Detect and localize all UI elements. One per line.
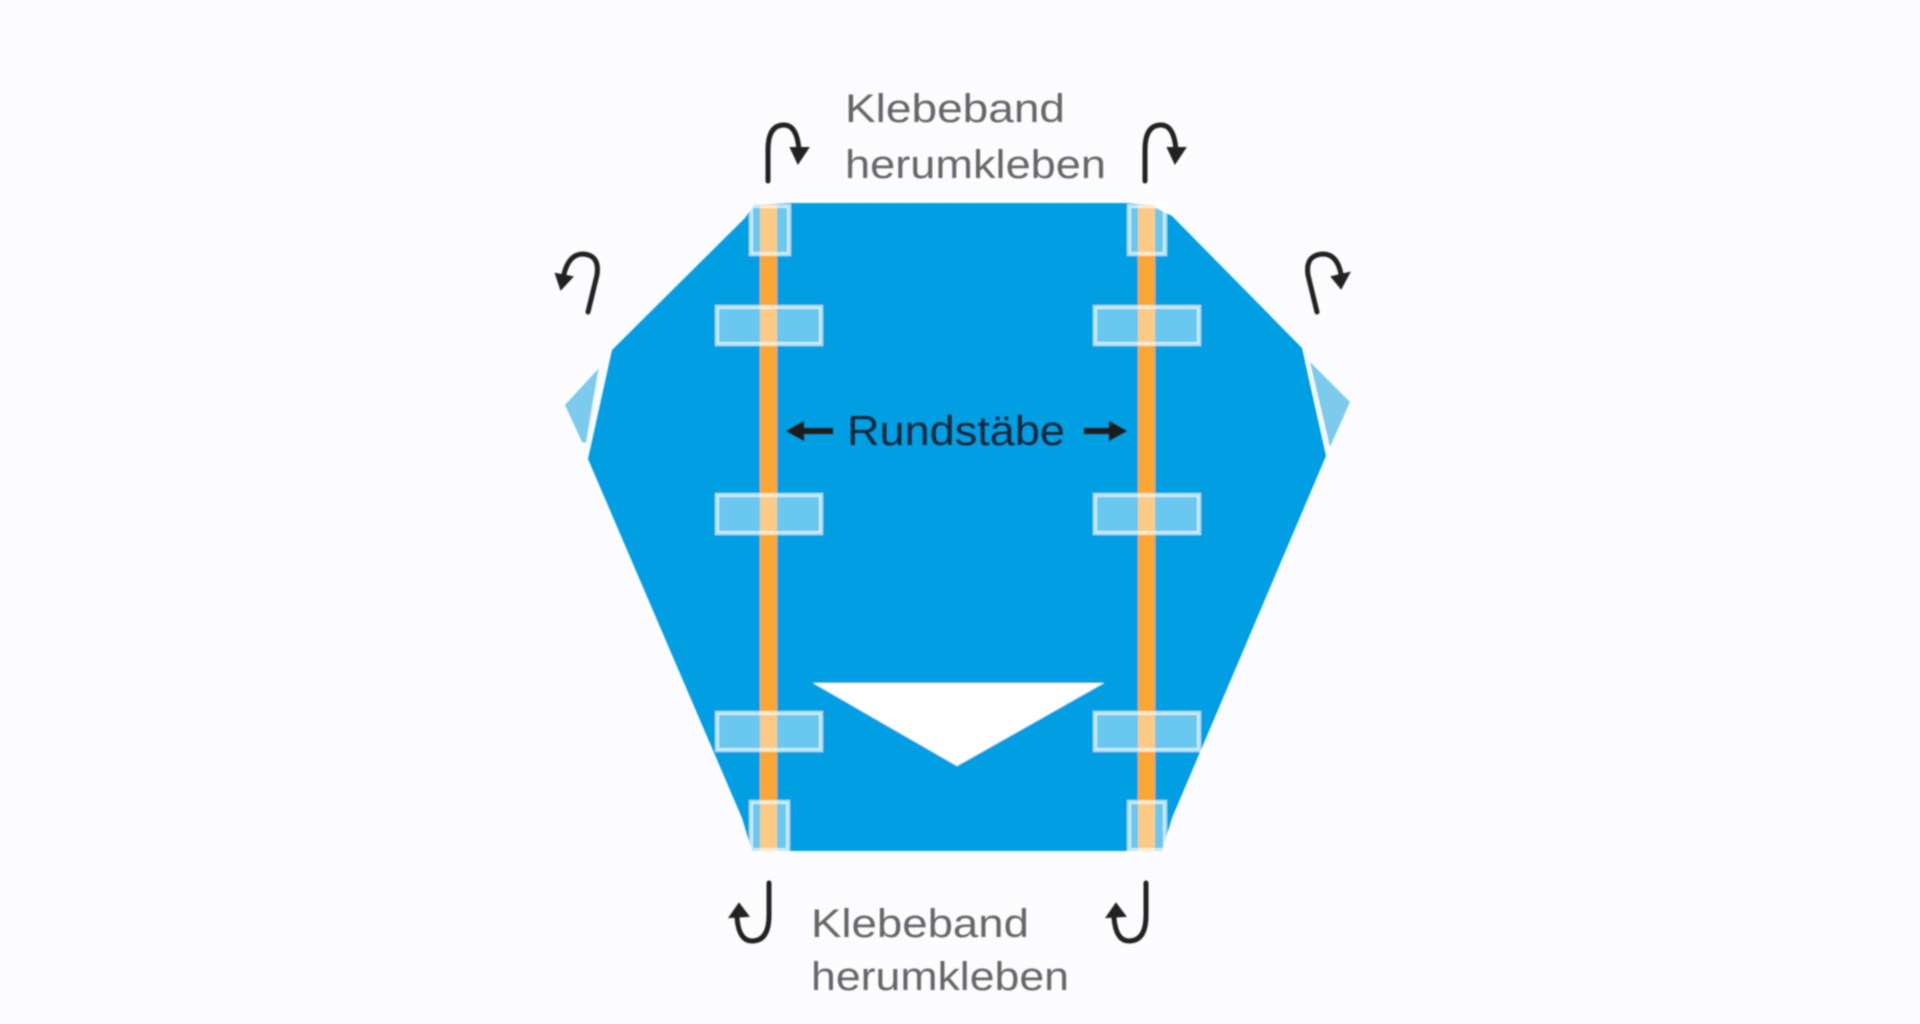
arrow bottom right	[1107, 883, 1146, 941]
white triangle opening	[813, 683, 1104, 766]
tape bottom right	[1129, 802, 1165, 850]
right dowel	[1138, 205, 1155, 851]
label: top tape instruction	[845, 87, 1106, 187]
tape right 3	[1095, 713, 1199, 750]
arrow to left dowel	[786, 421, 833, 441]
arrow top left	[768, 125, 808, 181]
tape right 1	[1095, 307, 1199, 344]
label: top tape instruction: herumkleben	[845, 143, 1106, 187]
tape left 2	[717, 495, 821, 533]
kite body	[588, 203, 1326, 851]
arrow top right	[1145, 125, 1185, 181]
tape right 2	[1095, 495, 1199, 533]
left flap	[565, 367, 600, 443]
left dowel	[760, 205, 777, 851]
label: top tape instruction: Klebeband	[845, 87, 1065, 131]
tape top left	[751, 206, 789, 254]
label: bottom tape instruction	[811, 902, 1069, 999]
right flap fold line	[1308, 362, 1328, 447]
label: bottom tape instruction: herumkleben	[811, 955, 1069, 999]
tape left 1	[717, 307, 821, 344]
kite artwork	[565, 203, 1350, 851]
tape top right	[1129, 206, 1165, 254]
label: dowels with arrows: Rundstäbe	[847, 407, 1065, 454]
arrow side left	[556, 254, 597, 312]
arrow side right	[1308, 254, 1349, 312]
tape bottom left	[751, 802, 788, 850]
label: bottom tape instruction: Klebeband	[811, 902, 1029, 946]
arrow bottom left	[730, 883, 769, 941]
tape strips	[717, 206, 1199, 850]
right flap	[1310, 362, 1350, 447]
left flap fold line	[587, 367, 600, 444]
tape left 3	[717, 713, 821, 750]
curved arrows	[556, 125, 1349, 941]
label: dowels with arrows	[786, 407, 1127, 454]
arrow to right dowel	[1084, 421, 1127, 441]
